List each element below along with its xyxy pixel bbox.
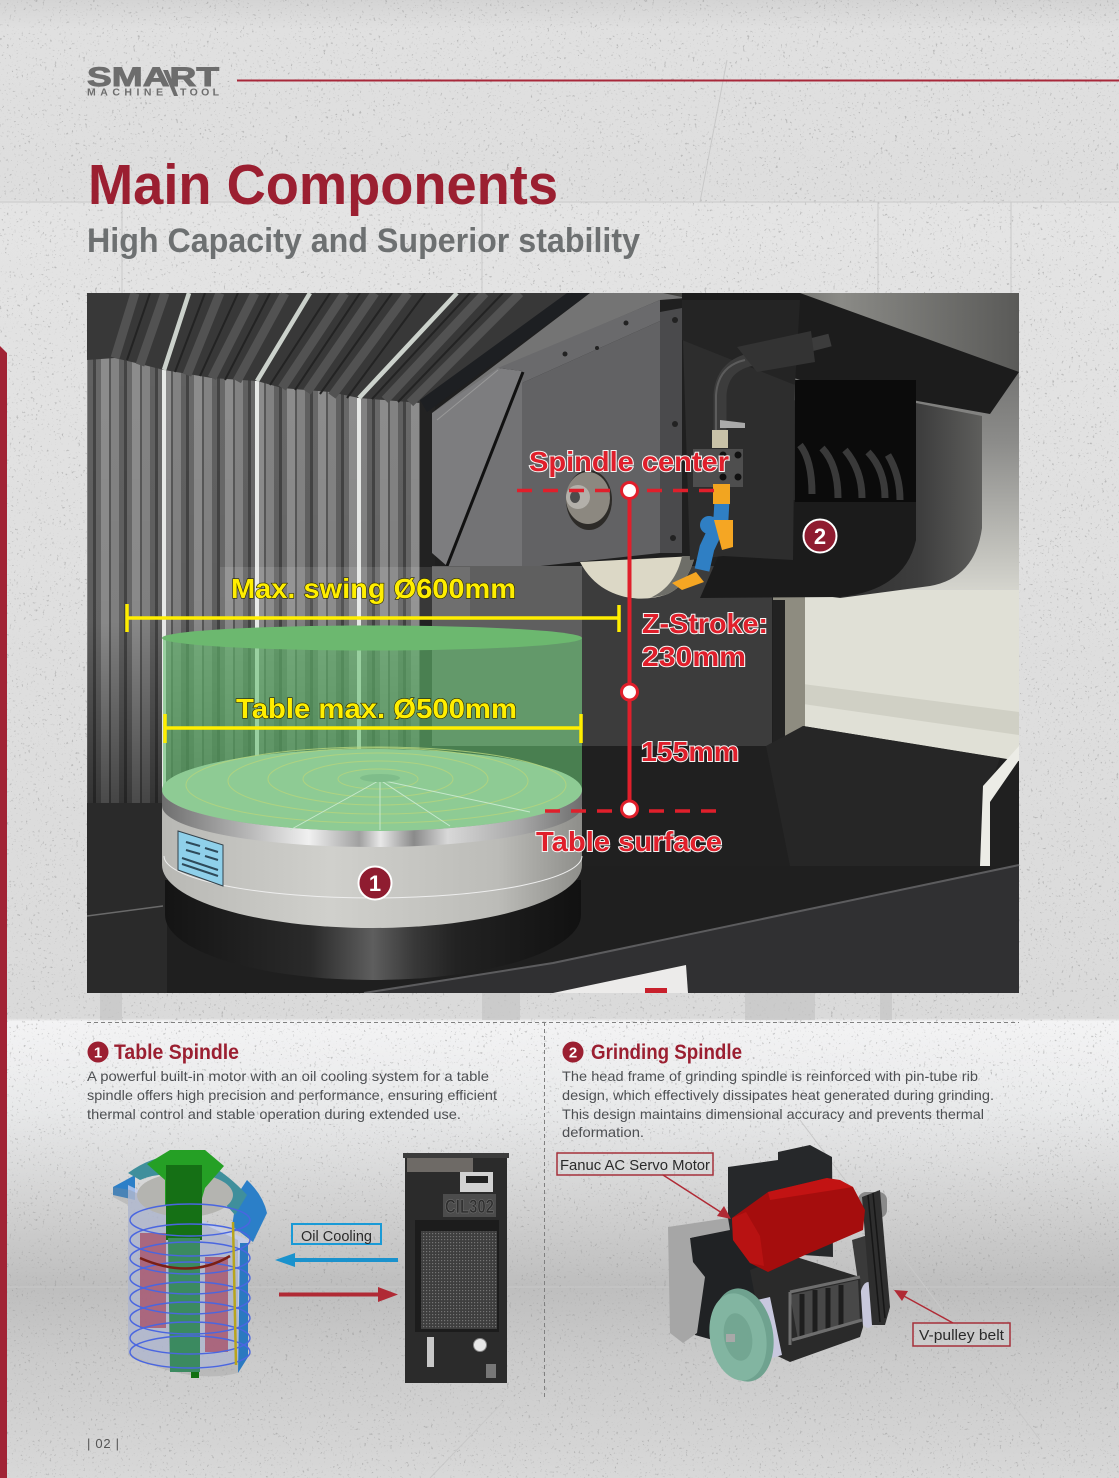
- grinding spindle description: design, which effectively dissipates heat generated during grinding.: [562, 1087, 994, 1103]
- oil cooler unit: [403, 1153, 509, 1383]
- table spindle description: [87, 1068, 497, 1122]
- photo: coolant tube and bracket: [693, 331, 830, 487]
- grinding spindle heading: 2: [569, 1044, 577, 1062]
- arrow: oil return: [279, 1287, 398, 1302]
- photo: grinding wheel: [580, 556, 695, 599]
- dimension: spindle center to table surface: 230mm: [642, 641, 746, 672]
- grinding spindle heading: Grinding Spindle: [591, 1041, 742, 1064]
- section: grinding spindle: [557, 1041, 1010, 1386]
- left red edge bar: [0, 346, 7, 1478]
- arrow: to V-pulley belt: [894, 1290, 953, 1323]
- oil cooling label: Oil Cooling: [301, 1228, 372, 1245]
- photo: angled bellows roof: [87, 293, 575, 403]
- logo: Smart Machine Tool: [87, 62, 220, 98]
- table spindle description: thermal control and stable operation during extended use.: [87, 1106, 461, 1122]
- oil cooling label: [292, 1224, 381, 1245]
- grinding spindle assembly illustration: [668, 1145, 890, 1386]
- photo: grinding head frame: [420, 293, 772, 800]
- table spindle heading: 1: [94, 1044, 102, 1062]
- label: V-pulley belt: [913, 1323, 1010, 1346]
- title: Main Components: [88, 153, 558, 217]
- green working envelope: [162, 626, 582, 831]
- badge 2: [804, 520, 836, 552]
- arrow: to servo motor: [663, 1175, 731, 1219]
- badge 2: 2: [814, 524, 826, 549]
- dimension: spindle center to table surface: Spindle center: [529, 446, 729, 477]
- main machine photo: [87, 293, 1019, 993]
- oil cooler unit: CIL302: [445, 1197, 494, 1218]
- photo: vertical bellows: [87, 350, 432, 803]
- photo: right overhead and wall: [663, 293, 1019, 765]
- photo: spindle motor housing: [672, 331, 982, 598]
- table spindle cutaway illustration: [113, 1150, 267, 1378]
- dimension: max swing: Max. swing Ø600mm: [231, 573, 516, 604]
- photo: table chuck: [162, 749, 582, 980]
- dimension: table max: Table max. Ø500mm: [236, 693, 517, 724]
- grinding spindle description: deformation.: [562, 1124, 644, 1140]
- table spindle description: A powerful built-in motor with an oil cooling system for a table: [87, 1068, 489, 1084]
- badge 1: 1: [369, 871, 381, 896]
- photo: blue coolant nozzle: [672, 484, 733, 590]
- dimension: spindle center to table surface: Table surface: [536, 826, 722, 857]
- page number: | 02 |: [87, 1436, 119, 1451]
- grinding spindle description: [562, 1068, 994, 1140]
- dimension: max swing: [127, 573, 619, 632]
- dimension: spindle center to table surface: [517, 446, 768, 857]
- photo: chuck nameplate: [178, 831, 223, 886]
- dimension: spindle center to table surface: Z-Stroke:: [642, 608, 768, 639]
- grinding spindle description: This design maintains dimensional accuracy and prevents thermal: [562, 1106, 984, 1122]
- label: V-pulley belt: V-pulley belt: [919, 1327, 1005, 1344]
- badge 1: [358, 866, 392, 900]
- table spindle description: spindle offers high precision and performance, ensuring efficient: [87, 1087, 497, 1103]
- header rule: [237, 80, 1119, 82]
- photo: floor and front cover: [87, 726, 1019, 993]
- logo: Smart Machine Tool: TOOL: [180, 86, 220, 98]
- arrow: oil supply: [275, 1253, 398, 1267]
- section: table spindle: [87, 1041, 509, 1383]
- section dividers: [87, 1022, 1019, 1400]
- logo: Smart Machine Tool: SMART: [87, 62, 219, 92]
- table spindle heading: Table Spindle: [114, 1041, 239, 1064]
- subtitle: High Capacity and Superior stability: [87, 222, 640, 260]
- grinding spindle description: The head frame of grinding spindle is reinforced with pin-tube rib: [562, 1068, 978, 1084]
- label: Fanuc AC Servo Motor: Fanuc AC Servo Motor: [560, 1157, 710, 1174]
- light band behind swing label: [220, 567, 470, 617]
- photo: spindle nut: [566, 470, 612, 530]
- dimension: table max: [165, 693, 581, 743]
- logo: Smart Machine Tool: MACHINE: [87, 86, 163, 98]
- dimension: spindle center to table surface: 155mm: [641, 736, 739, 767]
